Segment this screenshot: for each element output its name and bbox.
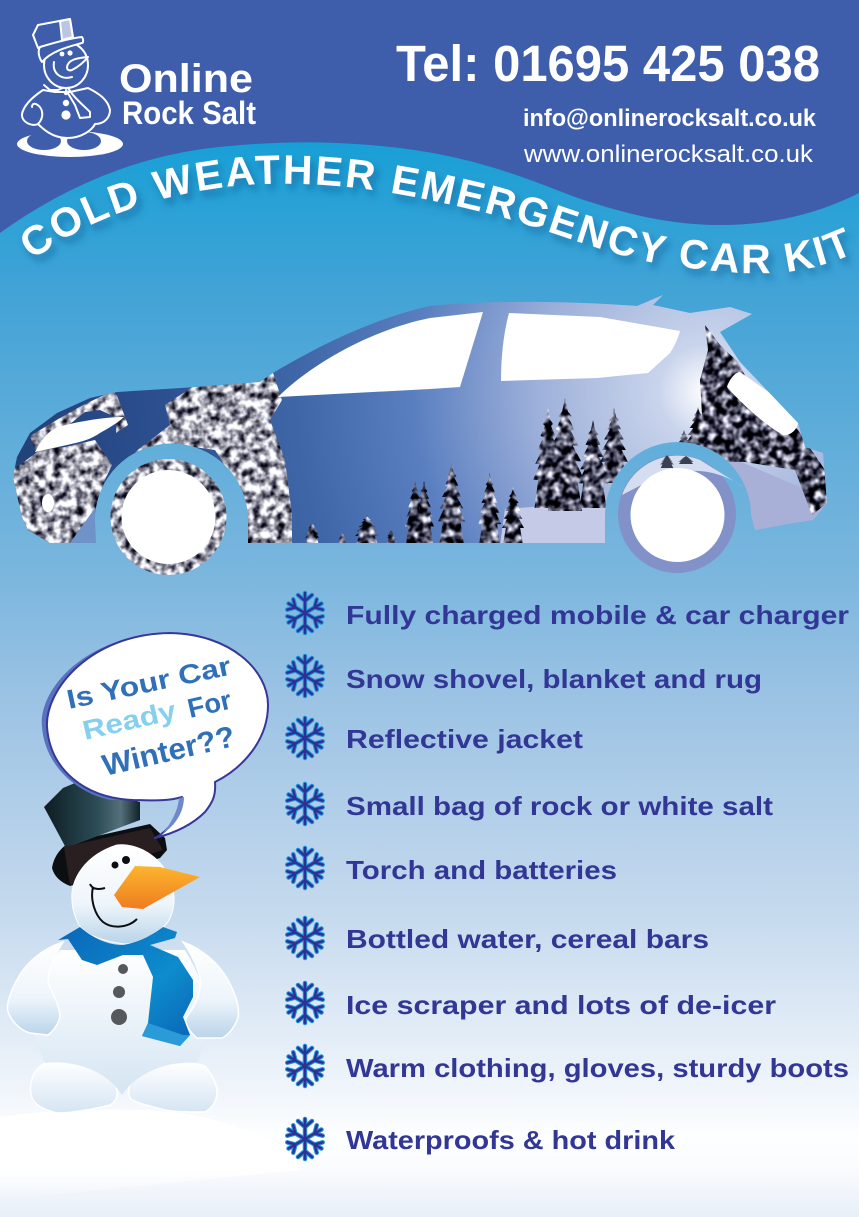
header wave band (0, 0, 859, 233)
item: bag of salt (286, 784, 773, 824)
rear wheel (618, 455, 745, 573)
eyes (112, 856, 130, 868)
top hat (44, 783, 167, 886)
smile (90, 884, 137, 927)
carrot nose (114, 866, 200, 909)
side windows (278, 312, 483, 397)
item: warm clothing (286, 1046, 849, 1086)
snowman mascot (7, 783, 239, 1113)
snow mound (0, 1110, 300, 1200)
logo wordmark (119, 57, 256, 131)
bubble outline (47, 633, 268, 838)
head light (35, 417, 124, 452)
item: water and cereal bars: Bottled water, cereal bars (346, 924, 709, 954)
logo wordmark: Online (119, 57, 253, 101)
item: waterproofs and hot drink: Waterproofs & hot drink (346, 1125, 676, 1155)
bubble text: For (185, 685, 235, 724)
fog lamp (42, 494, 54, 512)
website: www.onlinerocksalt.co.uk (523, 141, 814, 168)
title: curved heading: COLD WEATHER EMERGENCY CAR KIT (22, 155, 851, 281)
item: bag of salt: Small bag of rock or white salt (346, 791, 773, 821)
item: ice scraper and de-icer: Ice scraper and lots of de-icer (346, 990, 776, 1020)
front wheel (110, 459, 226, 575)
item: warm clothing: Warm clothing, gloves, sturdy boots (346, 1053, 849, 1083)
email: info@onlinerocksalt.co.uk (523, 105, 817, 132)
bubble text: Ready (80, 695, 179, 746)
car silhouette filled with snowy landscape (13, 295, 827, 575)
item: ice scraper and de-icer (286, 983, 776, 1023)
distant firs (305, 325, 827, 544)
item: shovel, blanket, rug (286, 656, 762, 696)
item: waterproofs and hot drink (286, 1119, 676, 1159)
logo wordmark: Rock Salt (122, 95, 256, 131)
checklist (286, 593, 849, 1159)
car body scene (13, 295, 827, 543)
torso (32, 950, 208, 1095)
snow ground (500, 506, 606, 543)
logo: Online Rock Salt (17, 19, 256, 157)
item: water and cereal bars (286, 918, 709, 958)
front snow-covered trees (10, 370, 292, 545)
bubble shadow (42, 633, 262, 800)
bubble text: Is Your Car (64, 651, 234, 715)
item: mobile and charger: Fully charged mobile & car charger (346, 600, 849, 630)
front wheel arch (95, 444, 248, 543)
bubble text: Winter?? (99, 720, 238, 783)
bumper sky patch (70, 508, 98, 543)
item: torch and batteries: Torch and batteries (346, 855, 617, 885)
contact details (396, 35, 820, 168)
telephone number: Tel: 01695 425 038 (396, 35, 820, 92)
speech bubble (42, 633, 268, 838)
logo snowman icon (17, 19, 123, 157)
tail light (727, 372, 798, 435)
rear wheel arch (605, 442, 755, 545)
scarf (58, 927, 193, 1046)
bubble text (64, 651, 238, 783)
item: reflective jacket: Reflective jacket (346, 724, 583, 754)
head (72, 845, 174, 944)
item: mobile and charger (286, 593, 849, 633)
buttons (111, 964, 128, 1025)
feet (31, 1062, 117, 1113)
item: shovel, blanket, rug: Snow shovel, blanket and rug (346, 664, 762, 694)
arms (7, 942, 63, 1035)
item: torch and batteries (286, 848, 617, 888)
item: reflective jacket (286, 718, 583, 758)
bubble tail shading (163, 797, 184, 833)
